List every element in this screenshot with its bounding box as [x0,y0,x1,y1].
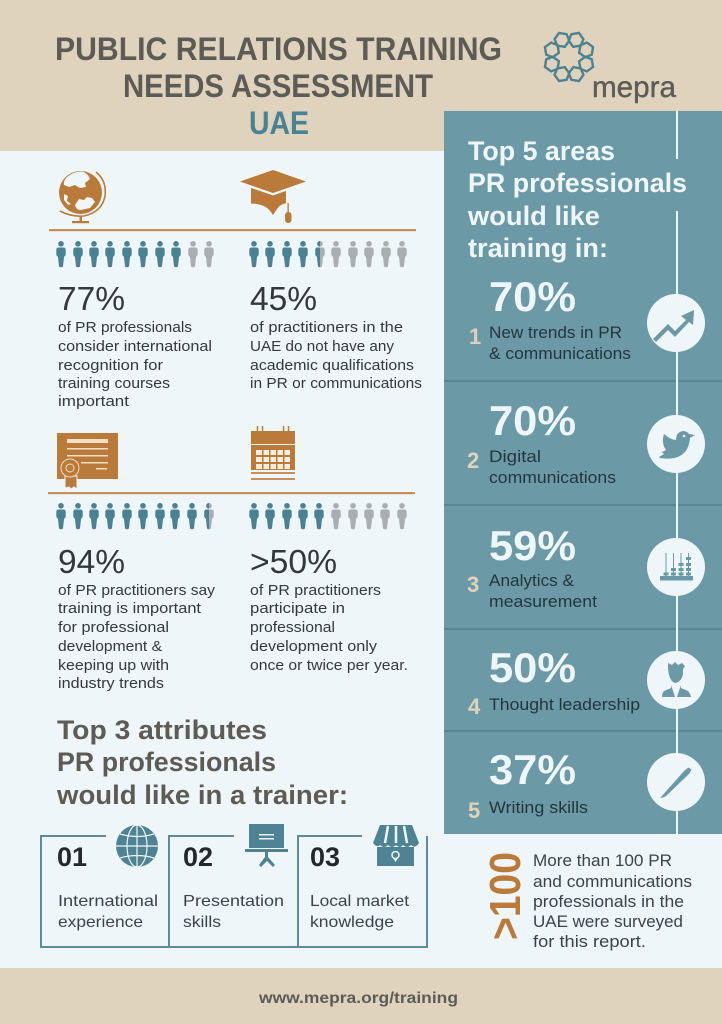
divider: first stats row [49,229,416,231]
callout: over 100 surveyed: for this report. [533,933,646,951]
icon: abacus [647,538,705,596]
item 1: new trends [469,273,631,363]
icon: presentation board [245,824,288,867]
item 3: analytics: measurement [489,593,597,611]
callout: over 100 surveyed: >100 [481,852,530,940]
stat: over 50 percent: professional [250,619,335,636]
icon: certificate [57,433,118,489]
attribute 02: skills [183,914,221,931]
stat: 77 percent: 77% [58,280,125,317]
stat: 94 percent: keeping up with [58,657,169,674]
attribute 01 [57,842,158,931]
stat: over 50 percent: >50% [250,543,337,580]
stat: 45 percent: academic qualifications [250,357,414,374]
stat: 94 percent: 94% [58,543,125,580]
pictogram: over 50 percent [249,503,407,529]
icon: wire globe [116,825,158,867]
item 3: analytics: 3 [467,572,479,597]
icon: logo ring [542,30,596,84]
stat: 94 percent [58,543,216,692]
stat: 94 percent: for professional [58,619,169,636]
heading: top 5 areas [467,136,687,263]
stat: over 50 percent: participate in [250,600,345,617]
item 4: thought leadership: 50% [489,644,576,691]
icon: pen [647,753,705,811]
title: PUBLIC RELATIONS TRAINING [55,31,502,67]
item 5: writing skills: 37% [489,746,576,793]
icon: globe [59,171,105,223]
icon: storefront [373,825,419,866]
icon: bird [647,415,705,473]
footer url: www.mepra.org/training [258,990,458,1007]
pictogram: 94 percent [56,503,214,529]
item 2: digital communications: 2 [467,448,479,473]
stat: 45 percent: UAE do not have any [250,338,395,355]
icon: thought leader [647,651,705,709]
stat: 77 percent: consider international [58,338,212,355]
item 3: analytics: Analytics & [489,572,574,590]
item 2: digital communications: communications [489,469,616,487]
item 4: thought leadership: Thought leadership [489,696,640,714]
item 1: new trends: 1 [469,324,481,349]
item 5: writing skills: 5 [468,798,480,823]
callout: over 100 surveyed: UAE were surveyed [533,913,683,931]
stat: 77 percent: important [58,393,130,410]
item 4: thought leadership: 4 [468,694,481,719]
item 5: writing skills: Writing skills [489,799,588,817]
stat: 45 percent: of practitioners in the [250,319,403,336]
heading: top 3 attributes [56,715,348,810]
attribute 03: 03 [310,842,340,872]
divider: second stats row [48,492,415,494]
row dividers [444,381,722,731]
callout: over 100 surveyed: More than 100 PR [533,852,672,870]
heading: top 3 attributes: would like in a trainer: [56,780,348,810]
heading: top 3 attributes: Top 3 attributes [57,715,267,745]
callout: over 100 surveyed [481,852,692,951]
item 5: writing skills [468,746,588,823]
heading: top 5 areas: Top 5 areas [468,136,615,166]
box outlines [41,836,427,947]
stat: over 50 percent: development only [250,638,378,655]
stat: over 50 percent [250,543,408,674]
pictogram: 45 percent [249,241,407,267]
heading: top 3 attributes: PR professionals [57,747,276,777]
stat: 94 percent: of PR practitioners say [58,582,216,599]
stat: over 50 percent: once or twice per year. [250,657,408,674]
header band [0,0,722,151]
stat: 45 percent [250,280,422,392]
title [55,31,502,141]
icon: graduation cap [240,170,306,223]
item 1: new trends: & communications [489,345,631,363]
item 2: digital communications [467,397,616,487]
footer band [0,968,722,1024]
item 2: digital communications: 70% [489,397,576,444]
pictogram: 77 percent [56,241,214,267]
attribute 01: experience [58,914,143,931]
title: UAE [249,105,309,141]
item 4: thought leadership [468,644,640,719]
panel background [444,111,722,834]
attribute 01: International [58,893,158,910]
attribute 03: knowledge [310,914,394,931]
stat: over 50 percent: of PR practitioners [250,582,381,599]
stat: 77 percent: recognition for [58,357,163,374]
panel: top 5 areas [444,111,722,838]
panel: trainer attributes [41,824,427,947]
stat: 77 percent: training courses [58,375,170,392]
callout: over 100 surveyed: professionals in the [533,893,684,911]
stat: 94 percent: development & [58,638,162,655]
heading: top 5 areas: would like [467,201,600,231]
item 1: new trends: 70% [489,273,576,320]
heading: top 5 areas: training in: [468,233,608,263]
stat: 77 percent [58,280,212,410]
stat: 77 percent: of PR professionals [58,319,192,336]
stat: 45 percent: in PR or communications [250,375,422,392]
attribute 02: 02 [183,842,213,872]
attribute 02 [183,842,284,931]
timeline line [676,111,678,838]
mepra logo [542,30,676,104]
attribute 03: Local market [310,893,410,910]
heading: top 5 areas: PR professionals [468,168,687,198]
item 2: digital communications: Digital [489,448,541,466]
stat: 94 percent: training is important [58,600,202,617]
icon: calendar [251,426,295,480]
attribute 01: 01 [57,842,87,872]
stat: 45 percent: 45% [250,280,317,317]
callout: over 100 surveyed: and communications [533,873,692,891]
logo wordmark: mepra [592,71,676,104]
stat: 94 percent: industry trends [58,675,164,692]
item 3: analytics: 59% [489,522,576,569]
title: NEEDS ASSESSMENT [123,68,433,104]
attribute 03 [310,842,410,931]
icon: trend arrow [647,294,705,352]
item 3: analytics [467,522,597,611]
attribute 02: Presentation [183,893,284,910]
item 1: new trends: New trends in PR [489,324,622,342]
